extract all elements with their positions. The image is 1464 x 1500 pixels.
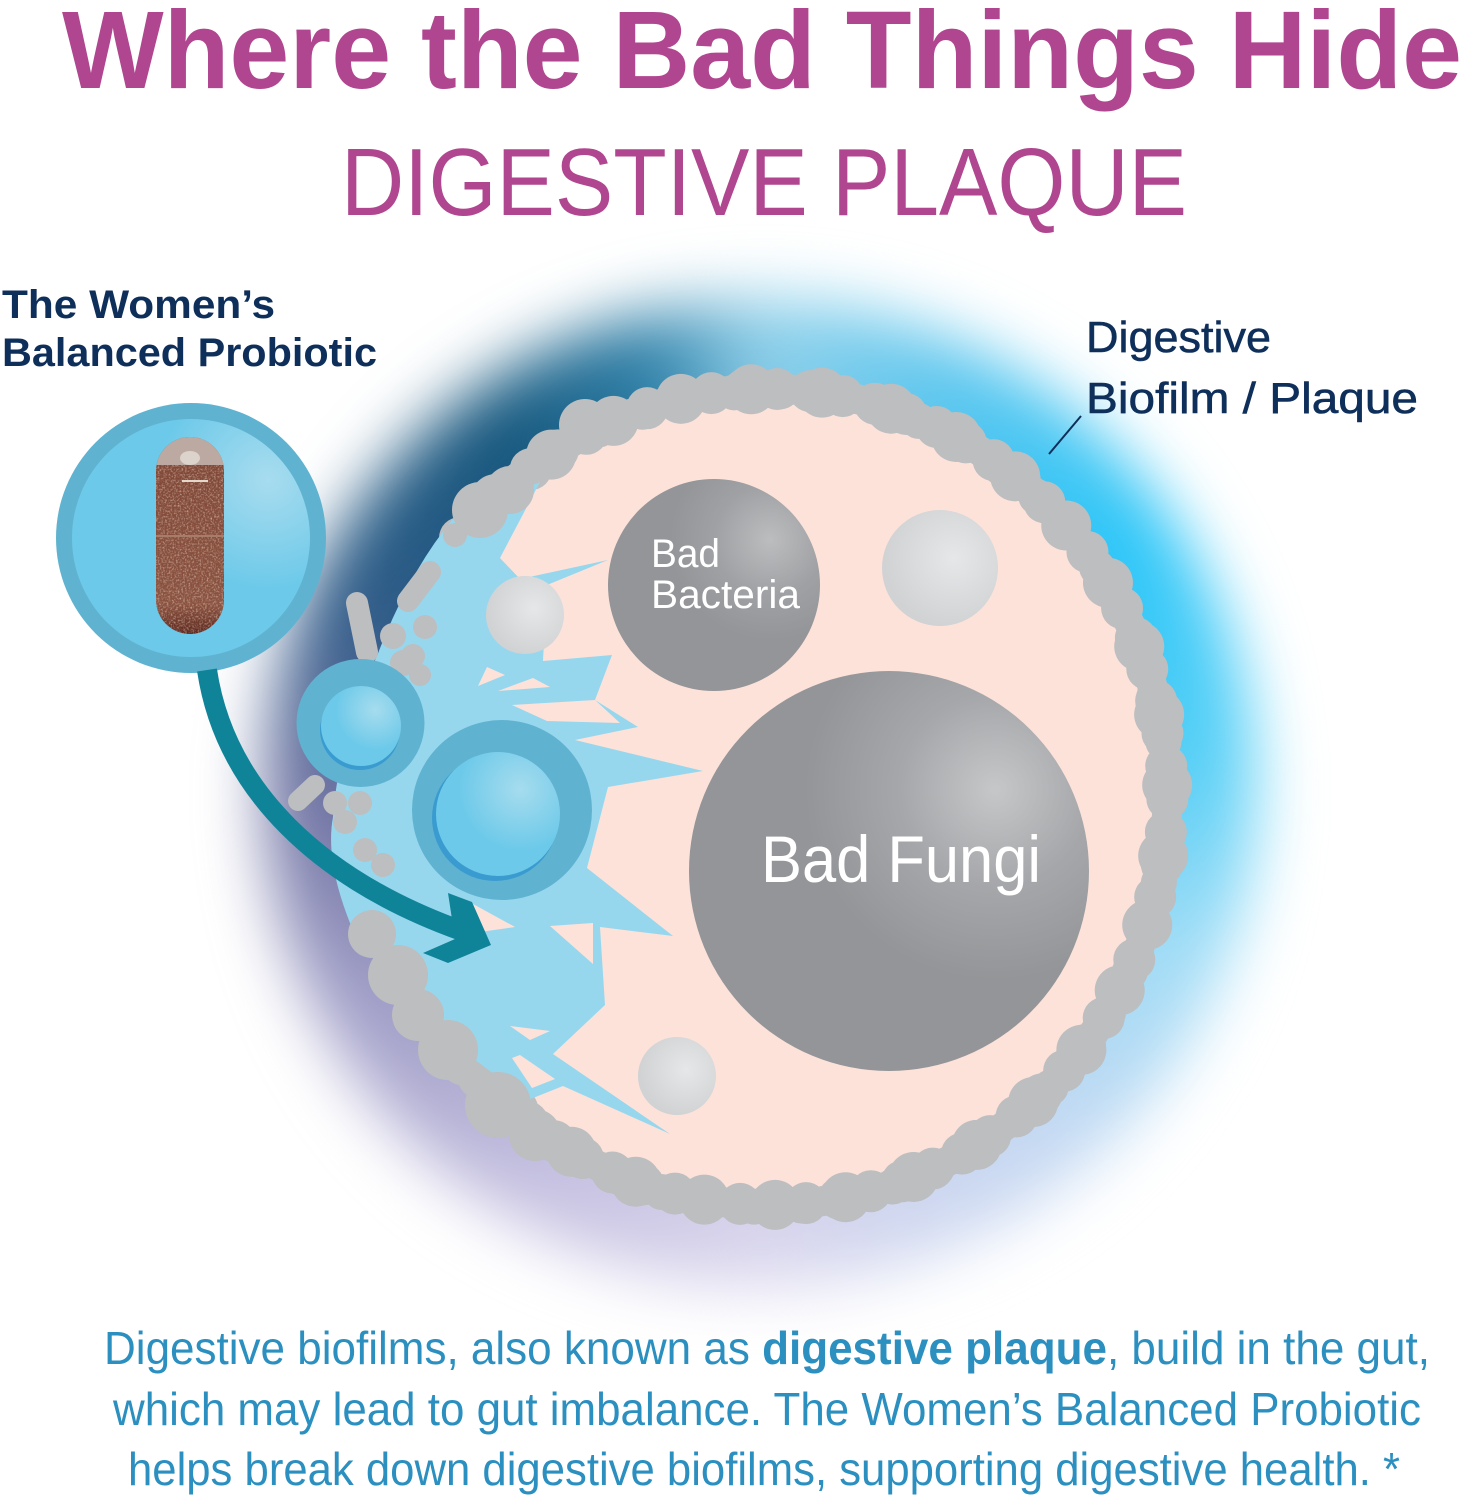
large probiotic bubble — [412, 720, 592, 900]
bad bacteria sphere — [608, 479, 820, 691]
label: digestive biofilm / plaque — [1049, 313, 1418, 454]
background glow — [265, 300, 1255, 1285]
bad fungi sphere — [689, 671, 1089, 1071]
capsule — [156, 437, 224, 634]
pink gut interior — [376, 393, 1160, 1203]
label: the women's balanced probiotic: Balanced Probiotic — [2, 331, 377, 375]
bad bacteria sphere: Bad — [651, 532, 720, 576]
description text: Digestive biofilms, also known as digestive plaque, build in the gut, — [104, 1322, 1430, 1374]
bad bacteria sphere: Bacteria — [651, 573, 801, 617]
small probiotic bubble — [296, 659, 424, 787]
biofilm broken area — [331, 482, 703, 1134]
plaque ring — [385, 389, 1167, 1207]
small sphere bottom — [638, 1037, 716, 1115]
plaque clumps lower left — [348, 399, 611, 1161]
label: the women's balanced probiotic — [2, 283, 377, 375]
subtitle: DIGESTIVE PLAQUE — [341, 129, 1187, 236]
label: the women's balanced probiotic: The Women’s — [2, 283, 275, 327]
label: digestive biofilm / plaque: Digestive — [1086, 313, 1271, 362]
small sphere left — [486, 576, 564, 654]
description text: which may lead to gut imbalance. The Women’s Balanced Probiotic — [112, 1383, 1421, 1435]
bad fungi sphere: Bad Fungi — [761, 822, 1041, 896]
label: digestive biofilm / plaque: Biofilm / Plaque — [1086, 374, 1418, 423]
description text: helps break down digestive biofilms, supporting digestive health. * — [128, 1443, 1400, 1495]
plaque debris — [298, 572, 437, 877]
small sphere top right — [882, 510, 998, 626]
arrow — [207, 670, 491, 963]
diagram: digestive plaque circle — [296, 389, 1167, 1207]
capsule circle — [56, 403, 326, 673]
description text — [104, 1322, 1430, 1495]
